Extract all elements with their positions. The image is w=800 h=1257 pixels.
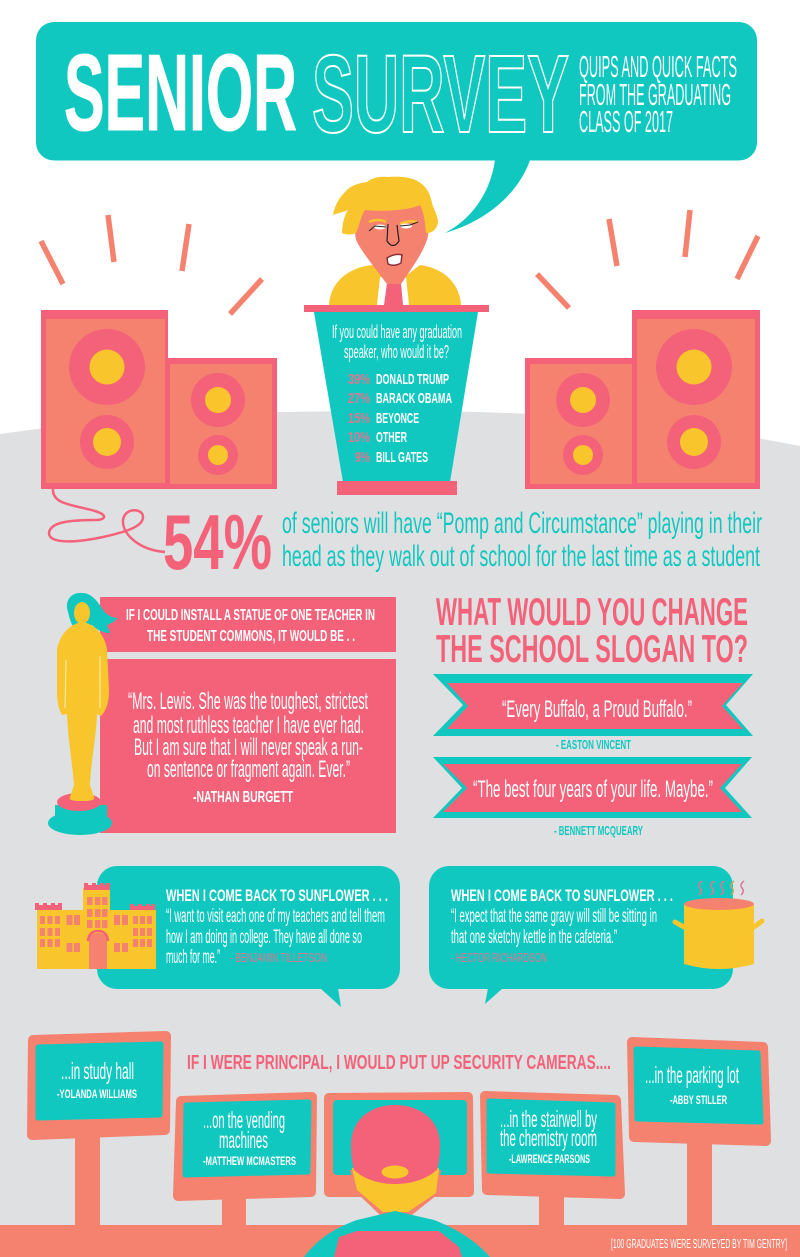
poll results (348, 371, 452, 466)
cameras heading: IF I WERE PRINCIPAL, I WOULD PUT UP SECURITY CAMERAS.... (187, 1052, 611, 1074)
monitor: vending machines (178, 1097, 312, 1227)
panel: teacher statue (48, 593, 396, 835)
monitor: stairwell: -LAWRENCE PARSONS (509, 1154, 590, 1166)
podium question: speaker, who would it be? (344, 342, 449, 362)
subtitle (579, 49, 737, 139)
speech bubble: cafeteria gravy: WHEN I COME BACK TO SUNFLOWER . . . (451, 886, 673, 905)
statue quote box: and most ruthless teacher I have ever had. (133, 712, 364, 739)
left sound lines (41, 215, 262, 314)
title: SENIOR (64, 32, 297, 154)
slogan heading (436, 591, 748, 671)
monitor: study hall (32, 1036, 166, 1227)
poll results: BEYONCE (376, 410, 419, 427)
speech bubble: cafeteria gravy: - HECTOR RICHARDSON (451, 950, 547, 965)
speech bubble: visit teachers: much for me.” (166, 947, 220, 968)
statue heading box (100, 597, 396, 652)
speech bubble: visit teachers: how I am doing in college. They have all done so (166, 927, 362, 948)
podium (304, 305, 489, 495)
monitor: study hall: ...in study hall (61, 1058, 134, 1084)
Pomp and Circumstance text (282, 507, 762, 573)
poll results: BILL GATES (376, 449, 428, 466)
poll results: OTHER (376, 429, 407, 446)
speech bubble: cafeteria gravy: that one sketchy kettle in the cafeteria.” (451, 927, 617, 948)
poll results: 15% (348, 410, 370, 427)
left speakers (41, 310, 277, 489)
monitor: study hall: -YOLANDA WILLIAMS (57, 1089, 137, 1101)
monitor: vending machines: ...on the vending (203, 1107, 285, 1133)
header speech bubble (36, 22, 757, 233)
slogan banner 2 (433, 757, 752, 818)
icon: kettle (675, 881, 762, 969)
poll results: 27% (348, 390, 370, 407)
monitor: parking lot: -ABBY STILLER (670, 1095, 727, 1107)
monitor: parking lot (632, 1042, 766, 1227)
speech bubble: cafeteria gravy (429, 866, 733, 1004)
statue quote box: But I am sure that I will never speak a run- (134, 734, 363, 761)
monitor: stairwell: the chemistry room (500, 1125, 597, 1151)
monitor: center (329, 1097, 469, 1192)
monitor: vending machines: -MATTHEW MCMASTERS (203, 1156, 296, 1168)
icon: statue (48, 593, 118, 835)
poll results: DONALD TRUMP (376, 371, 449, 388)
monitor: vending machines: machines (219, 1127, 268, 1153)
speech bubble: visit teachers: - BENJAMIN TILLETSON (230, 950, 327, 965)
monitor: stairwell (485, 1096, 620, 1227)
podium question (332, 322, 462, 362)
poll results: 9% (355, 449, 370, 466)
desk (0, 1225, 800, 1257)
54 percent stat: 54% (163, 498, 272, 586)
slogan attribution 2: - BENNETT MCQUEARY (554, 824, 643, 838)
podium: If you could have any graduation (332, 322, 462, 342)
speech bubble: visit teachers: WHEN I COME BACK TO SUNFLOWER . . . (166, 886, 388, 905)
statue quote box: -NATHAN BURGETT (193, 789, 293, 806)
statue quote box: on sentence or fragment again. Ever.” (147, 756, 350, 783)
poll results: 39% (348, 371, 370, 388)
slogan attribution 1: - EASTON VINCENT (556, 738, 631, 752)
right speakers (525, 310, 760, 489)
monitor: stairwell: ...in the stairwell by (500, 1106, 597, 1132)
speech bubble: visit teachers (97, 866, 400, 1007)
poll results: BARACK OBAMA (376, 390, 452, 407)
title: SURVEY (312, 33, 569, 156)
speaker cord (49, 489, 165, 552)
icon: school building (35, 883, 156, 969)
grey background (0, 411, 800, 1257)
poll results: 10% (348, 429, 370, 446)
slogan banner 1 (433, 674, 753, 736)
statue heading box: THE STUDENT COMMONS, IT WOULD BE . . (147, 628, 355, 645)
speaker figure at podium (329, 177, 461, 305)
statue quote box: “Mrs. Lewis. She was the toughest, strictest (128, 688, 368, 715)
statue heading box: IF I COULD INSTALL A STATUE OF ONE TEACHER IN (126, 607, 375, 624)
statue quote box (100, 659, 396, 833)
speech bubble: visit teachers: “I want to visit each one of my teachers and tell them (166, 906, 385, 927)
person watching monitors (304, 1105, 490, 1257)
right sound lines (537, 210, 758, 308)
